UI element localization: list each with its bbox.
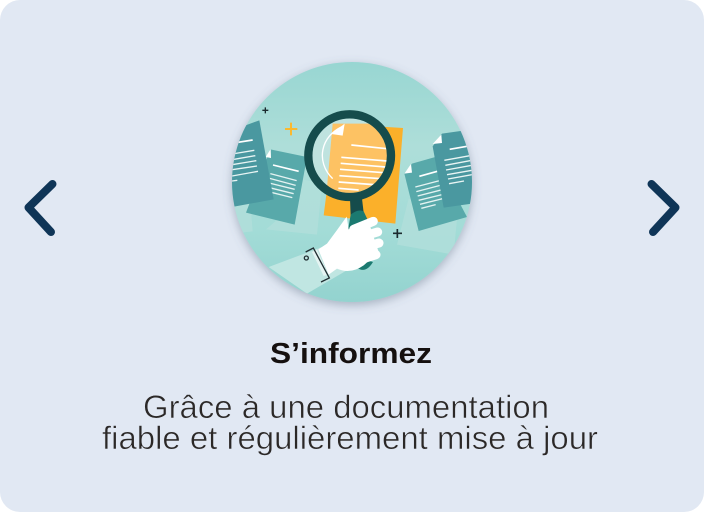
icon: left arrow bbox=[28, 184, 52, 232]
sparkle: black plus bbox=[393, 229, 402, 238]
document: orange centre bbox=[324, 124, 403, 224]
description text: fiable et régulièrement mise à jour bbox=[102, 420, 598, 456]
sleeve light band bbox=[269, 247, 346, 294]
description text: Grâce à une documentation bbox=[143, 389, 549, 425]
description text bbox=[102, 389, 598, 456]
illustration: documents and magnifying glass bbox=[232, 62, 472, 302]
heading: S’informez bbox=[270, 338, 432, 370]
document: left front bbox=[232, 120, 274, 207]
hand bbox=[318, 217, 379, 275]
document: right front bbox=[433, 129, 472, 208]
magnifying glass lens bbox=[312, 118, 387, 193]
document: left rear bbox=[246, 149, 307, 225]
sparkle: small black plus bbox=[262, 107, 268, 113]
illustration background circle bbox=[232, 62, 472, 302]
sparkle: yellow plus bbox=[285, 123, 297, 135]
shirt cuff bbox=[304, 248, 329, 282]
faded background documents bbox=[235, 193, 456, 254]
icon: right arrow bbox=[652, 184, 676, 232]
document: right rear bbox=[404, 157, 467, 231]
magnifying glass ring and handle bbox=[308, 114, 391, 270]
